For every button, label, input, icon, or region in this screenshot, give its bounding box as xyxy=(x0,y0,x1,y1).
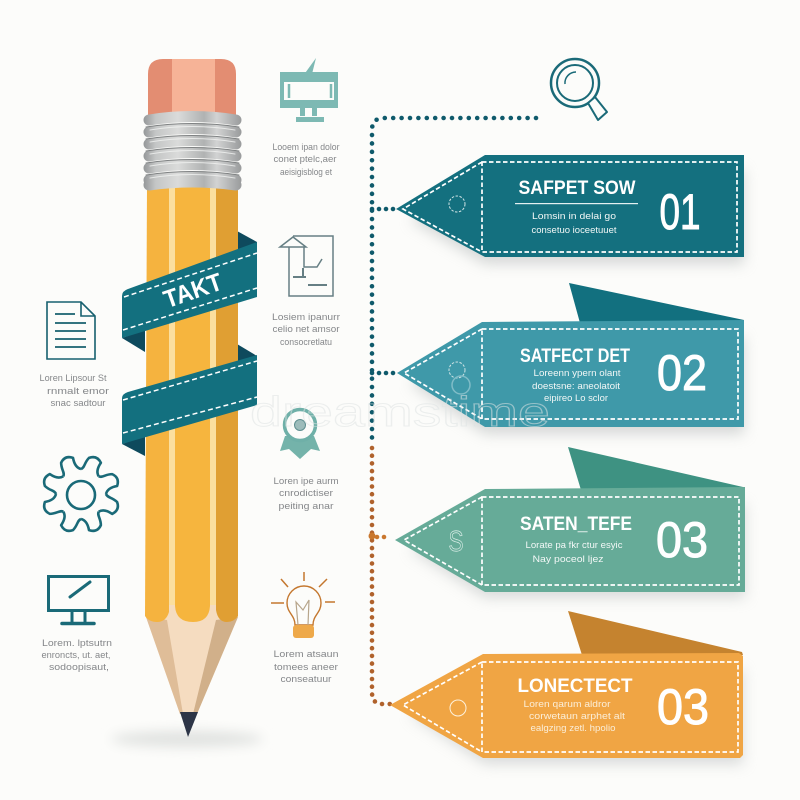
caption: monitor: conet ptelc,aer xyxy=(274,154,336,165)
caption: desktop monitor xyxy=(42,638,112,673)
description: doestsne: aneolatoit xyxy=(532,381,620,392)
stitching xyxy=(404,497,739,585)
ribbon: TAKT band xyxy=(122,242,257,352)
tag body xyxy=(396,155,744,257)
heading: SATFECT DET xyxy=(520,346,630,367)
tag letter: S xyxy=(448,526,464,558)
description: corwetaun arphet alt xyxy=(529,711,625,722)
description xyxy=(532,211,617,236)
panel: step 04 xyxy=(390,611,743,764)
icon: magnifier xyxy=(551,59,607,120)
tag shadow xyxy=(410,670,743,764)
caption: desktop monitor: Lorem. lptsutrn xyxy=(42,638,112,649)
icon: blueprint document xyxy=(280,236,333,296)
ribbon label: TAKT xyxy=(160,268,226,314)
icon: document xyxy=(47,302,95,359)
caption: bulb: conseatuur xyxy=(280,674,332,685)
tag shadow xyxy=(410,504,745,598)
description: eipireo Lo sclor xyxy=(544,393,608,404)
number: 02 xyxy=(657,345,707,401)
heading: SAFPET SOW xyxy=(518,178,636,199)
caption: badge: cnrodictiser xyxy=(279,488,333,499)
stitching xyxy=(403,662,738,752)
pencil ground shadow xyxy=(111,731,263,747)
caption: monitor: Looem ipan dolor xyxy=(272,142,340,153)
tag body xyxy=(390,653,743,758)
description xyxy=(526,540,623,565)
description: Lorate pa fkr ctur esyic xyxy=(526,540,623,551)
dotted connector xyxy=(368,118,536,704)
rule xyxy=(515,203,638,204)
watermark: dreamstime xyxy=(250,388,550,435)
caption: blueprint xyxy=(272,312,340,348)
watermark swirl xyxy=(452,376,470,394)
caption: badge: Loren ipe aurm xyxy=(274,476,339,487)
tag hole xyxy=(449,196,465,212)
icon: desktop monitor xyxy=(48,576,108,624)
tag flap xyxy=(568,447,744,490)
description: Nay poceol ljez xyxy=(532,554,604,565)
caption: badge xyxy=(274,476,339,512)
caption: bulb: Lorem atsaun xyxy=(274,649,338,660)
caption: document xyxy=(40,373,109,409)
description: Loren qarum aldror xyxy=(524,699,610,710)
tag flap xyxy=(568,611,743,655)
description: Loreenn ypern olant xyxy=(534,368,621,379)
icon: light bulb xyxy=(271,572,335,638)
tag hole xyxy=(450,700,466,716)
ribbon: lower band xyxy=(122,355,257,456)
heading: LONECTECT xyxy=(518,676,633,697)
caption: desktop monitor: enroncts, ut. aet, xyxy=(42,650,110,661)
number: 01 xyxy=(660,184,700,240)
tag body xyxy=(397,320,744,427)
number: 03 xyxy=(657,679,709,735)
pencil body xyxy=(145,185,238,622)
caption: monitor: aeisigisblog et xyxy=(280,167,332,178)
tag shadow xyxy=(410,337,744,434)
description: consetuo ioceetuuet xyxy=(532,225,617,236)
metal ferrule xyxy=(146,116,239,185)
panel: step 01 xyxy=(396,155,744,264)
panel: step 02 xyxy=(397,283,744,434)
number: 03 xyxy=(656,512,708,568)
panel: step 03 xyxy=(395,447,745,598)
pencil illustration xyxy=(145,59,239,737)
caption: document: Loren Lipsour St xyxy=(40,373,107,384)
caption: bulb: tomees aneer xyxy=(274,662,338,673)
eraser xyxy=(148,59,236,121)
caption: bulb xyxy=(274,649,338,685)
caption: document: rnmalt emor xyxy=(47,386,109,397)
caption: blueprint: Losiem ipanurr xyxy=(272,312,340,323)
description xyxy=(532,368,621,404)
ribbon back folds xyxy=(237,231,257,375)
description: Lomsin in delai go xyxy=(532,211,616,222)
caption: blueprint: consocretlatu xyxy=(280,337,332,348)
icon: monitor with needle xyxy=(280,58,338,122)
caption: document: snac sadtour xyxy=(50,398,106,409)
heading: SATEN_TEFE xyxy=(520,514,632,535)
description: ealgzing zetl. hpolio xyxy=(530,723,616,734)
tag hole xyxy=(449,362,465,378)
description xyxy=(524,699,625,734)
caption: badge: peiting anar xyxy=(278,501,334,512)
tag flap xyxy=(569,283,744,323)
icon: gear xyxy=(41,454,121,534)
stitching xyxy=(404,329,738,419)
pencil tip xyxy=(146,600,238,737)
tag shadow xyxy=(410,170,744,264)
tag body xyxy=(395,487,745,592)
icon: badge xyxy=(280,410,320,459)
stitching xyxy=(403,162,737,252)
caption: monitor xyxy=(272,142,340,178)
caption: desktop monitor: sodoopisaut, xyxy=(49,662,109,673)
caption: blueprint: celio net amsor xyxy=(272,324,340,335)
